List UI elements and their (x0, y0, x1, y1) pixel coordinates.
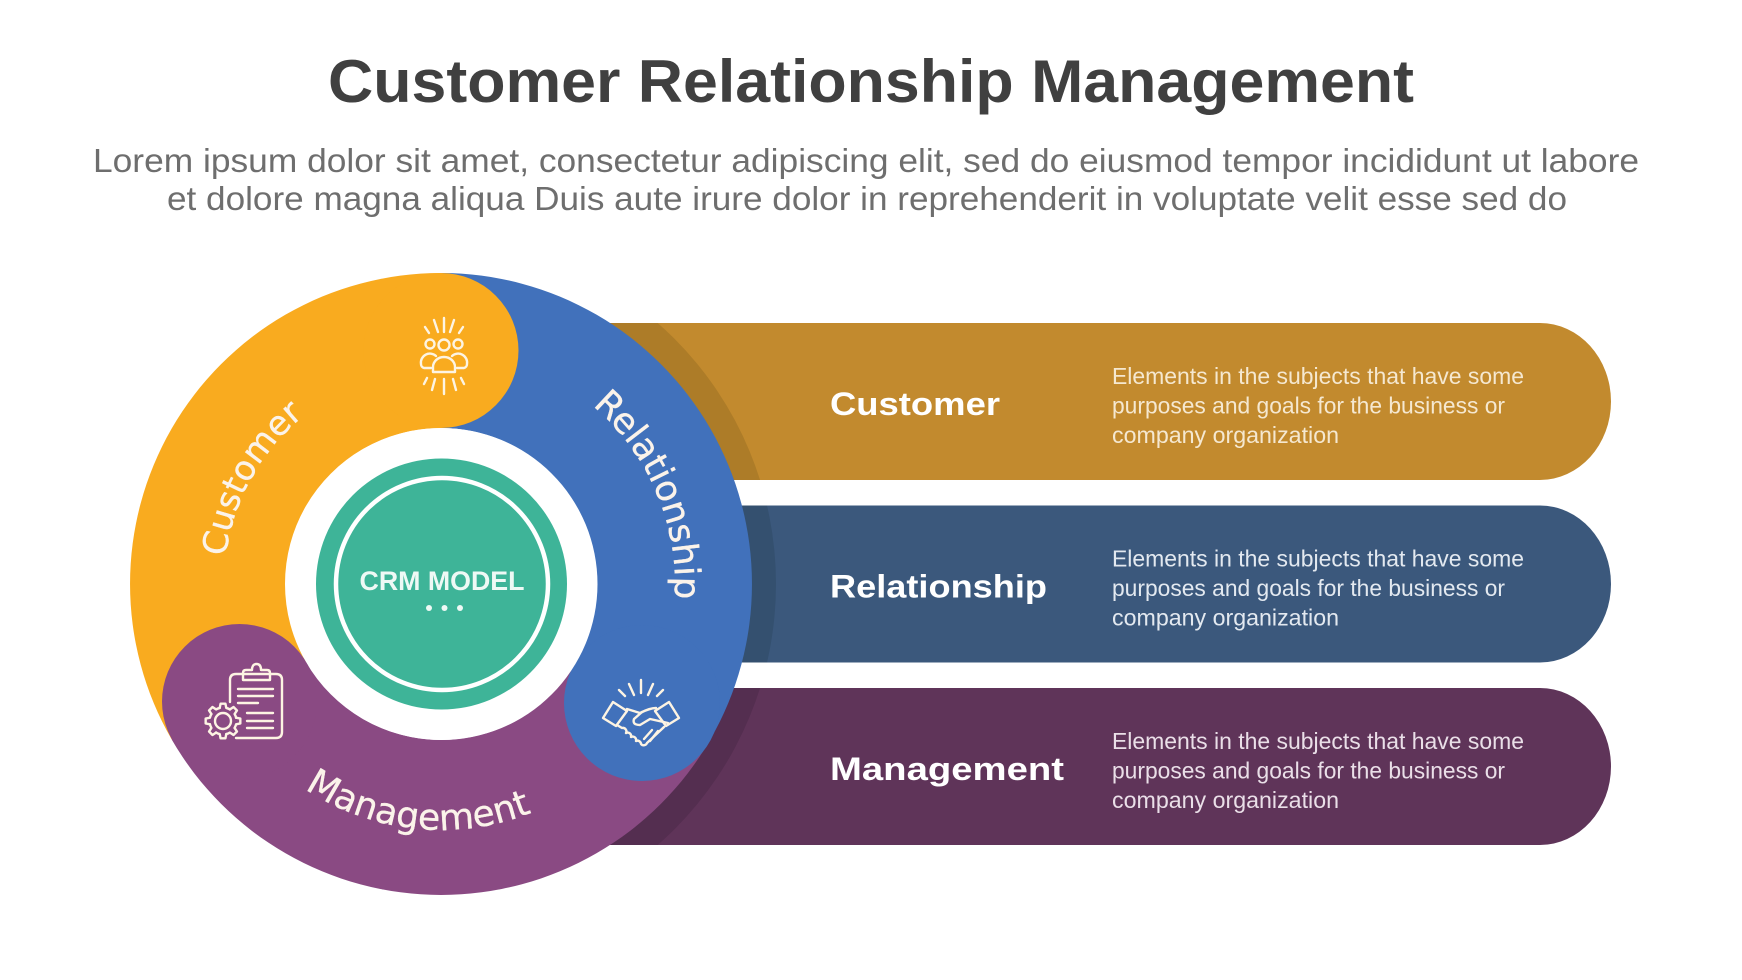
customer heading: Customer (830, 386, 1000, 422)
subtitle text block: Lorem ipsum dolor sit amet, consectetur adipiscing elit, sed do eiusmod tempor incididunt ut labore (93, 142, 1639, 179)
three dots (426, 605, 463, 611)
subtitle text block: et dolore magna aliqua Duis aute irure dolor in reprehenderit in voluptate velit esse sed do (167, 180, 1567, 217)
relationship heading: Relationship (830, 568, 1047, 604)
relationship bar shadow (742, 506, 776, 662)
center white disc (286, 428, 598, 740)
customer bar shadow (610, 323, 760, 480)
relationship description: company organization (1112, 604, 1339, 630)
customer description: company organization (1112, 422, 1339, 448)
ring segment: customer (130, 273, 441, 740)
curved label: customer: Customer (202, 401, 298, 554)
center label: CRM MODEL (360, 566, 524, 596)
circular ring diagram (130, 273, 752, 895)
title: Customer Relationship Management (328, 48, 1414, 115)
management description: Elements in the subjects that have some (1112, 728, 1524, 754)
management heading: Management (830, 751, 1064, 787)
icon: clipboard with gear (206, 664, 282, 738)
relationship description (1112, 546, 1524, 630)
customer description (1112, 363, 1524, 448)
icon: people group (421, 318, 467, 394)
ring segment: management (172, 662, 710, 895)
panel: relationship bar (742, 506, 1611, 662)
relationship description: purposes and goals for the business or (1112, 575, 1505, 601)
round head: relationship (564, 625, 720, 781)
ring segment: relationship (441, 273, 752, 740)
customer description: Elements in the subjects that have some (1112, 363, 1524, 389)
curved label: relationship: Relationship (594, 388, 702, 598)
customer bar shape (600, 323, 1611, 480)
management bar shadow (610, 688, 760, 845)
relationship bar shape (600, 506, 1611, 662)
relationship description: Elements in the subjects that have some (1112, 546, 1524, 572)
icon: handshake (603, 680, 679, 745)
management description: purposes and goals for the business or (1112, 758, 1505, 784)
subtitle text block (93, 142, 1639, 217)
panel: management bar (610, 688, 1611, 845)
round head: customer (364, 273, 518, 428)
management description (1112, 728, 1524, 813)
center badge: CRM model (316, 458, 567, 710)
management bar shape (600, 688, 1611, 845)
management description: company organization (1112, 787, 1339, 813)
round head: management (162, 624, 317, 779)
green circle (316, 458, 567, 710)
curved label: management: Management (307, 768, 532, 836)
white inner ring (336, 478, 548, 690)
panel: customer bar (610, 323, 1611, 480)
customer description: purposes and goals for the business or (1112, 392, 1505, 418)
